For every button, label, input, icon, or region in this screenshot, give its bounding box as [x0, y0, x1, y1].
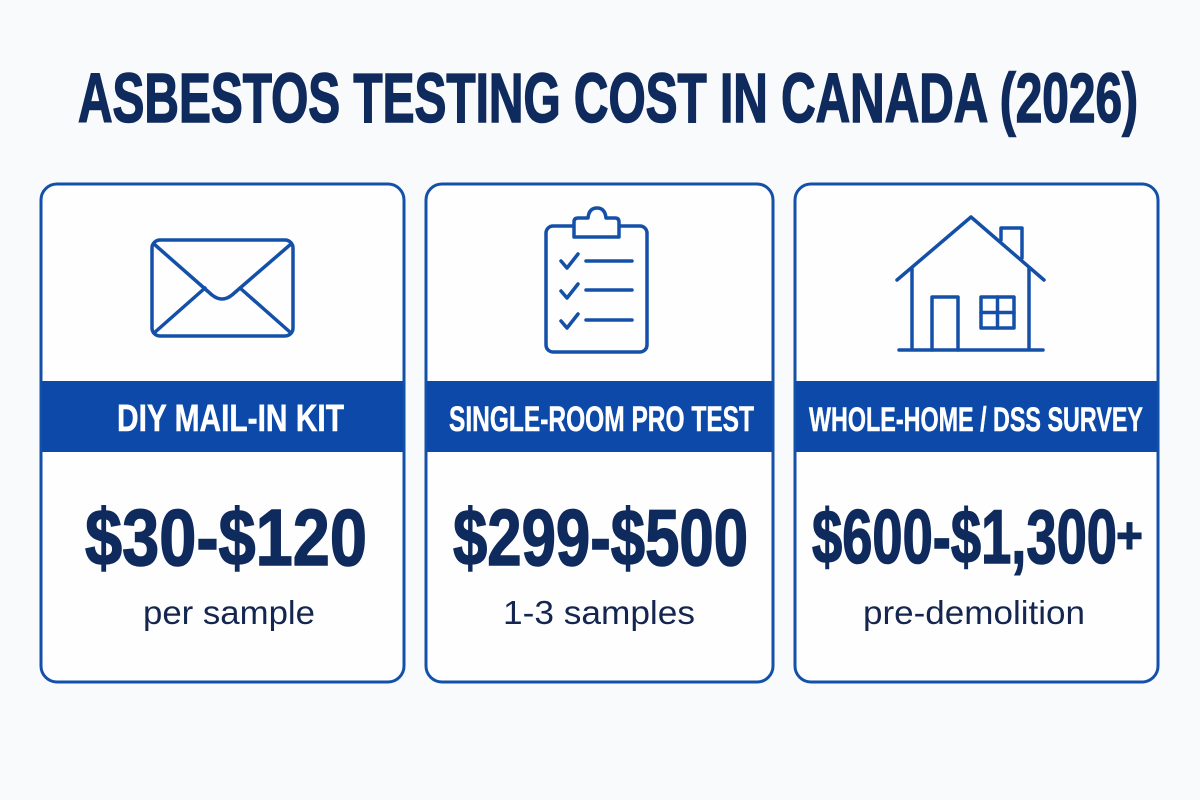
price: $299-$500: $299-$500 — [453, 493, 748, 582]
band: single-room pro test: SINGLE-ROOM PRO TEST — [449, 400, 754, 439]
icon: house — [897, 217, 1044, 350]
note: 1-3 samples: 1-3 samples — [503, 594, 695, 631]
band: DIY mail-in kit — [42, 381, 403, 452]
panel: DIY mail-in kit — [41, 184, 404, 682]
panel: whole-home / DSS survey — [795, 184, 1158, 682]
band: whole-home / DSS survey — [796, 381, 1157, 452]
icon: clipboard — [546, 208, 647, 352]
icon: envelope — [152, 240, 293, 336]
price: $30-$120: $30-$120 — [85, 493, 367, 582]
band: single-room pro test — [427, 381, 772, 452]
band: DIY mail-in kit: DIY MAIL-IN KIT — [117, 398, 344, 440]
note: per sample: per sample — [143, 594, 315, 631]
panel: single-room pro test — [426, 184, 773, 682]
price: $600-$1,300+: + — [1116, 507, 1143, 565]
note: pre-demolition: pre-demolition — [863, 594, 1085, 631]
